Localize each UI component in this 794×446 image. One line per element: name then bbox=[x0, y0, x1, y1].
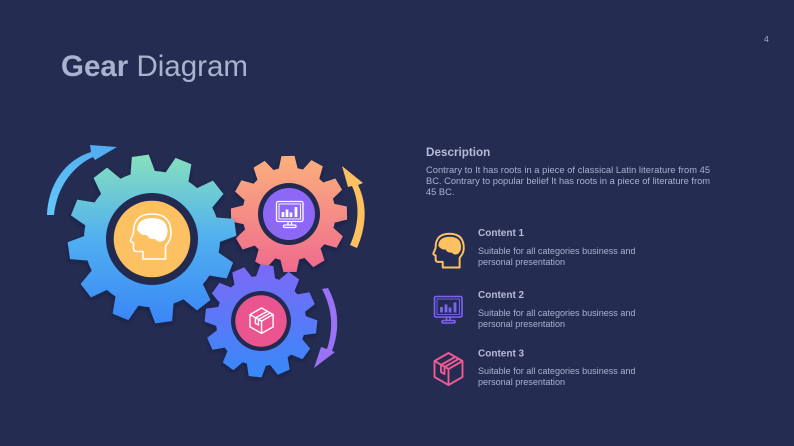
text: personal presentation bbox=[478, 257, 565, 267]
icon: monitor white bbox=[276, 202, 303, 228]
content item 1 bbox=[433, 228, 635, 268]
description block bbox=[426, 146, 710, 197]
description body: Contrary to It has roots in a piece of classical Latin literature from 45 bbox=[426, 165, 710, 175]
arrow: yellow curved bbox=[342, 166, 365, 248]
page number: 4 bbox=[764, 34, 769, 44]
gear: top right orange bbox=[230, 156, 348, 274]
icon: box white bbox=[250, 308, 273, 333]
icon: box pink bbox=[434, 353, 462, 385]
text bbox=[478, 366, 635, 387]
arrow: blue curved bbox=[47, 145, 117, 215]
icon: monitor purple bbox=[434, 296, 462, 323]
description heading: Description bbox=[426, 146, 490, 159]
text: Suitable for all categories business and bbox=[478, 366, 635, 376]
text bbox=[478, 246, 635, 267]
icon: head yellow bbox=[433, 234, 464, 268]
description body bbox=[426, 165, 710, 197]
title: Gear Diagram bbox=[61, 50, 248, 83]
heading: Content 1 bbox=[478, 228, 525, 239]
heading: Content 3 bbox=[478, 348, 525, 360]
text: Suitable for all categories business and bbox=[478, 308, 635, 318]
text bbox=[478, 308, 635, 329]
description body: BC. Contrary to popular belief It has roots in a piece of literature from bbox=[426, 176, 710, 186]
arrow: purple curved bbox=[314, 288, 337, 368]
text: personal presentation bbox=[478, 377, 565, 387]
content item 3 bbox=[434, 348, 635, 387]
text: Suitable for all categories business and bbox=[478, 246, 635, 256]
gear: bottom blue bbox=[204, 264, 318, 380]
icon: head white bbox=[130, 214, 171, 259]
content item 2 bbox=[434, 290, 635, 329]
gear: large left teal-blue bbox=[68, 154, 239, 325]
text: personal presentation bbox=[478, 319, 565, 329]
heading: Content 2 bbox=[478, 290, 525, 301]
description body: 45 BC. bbox=[426, 187, 454, 197]
